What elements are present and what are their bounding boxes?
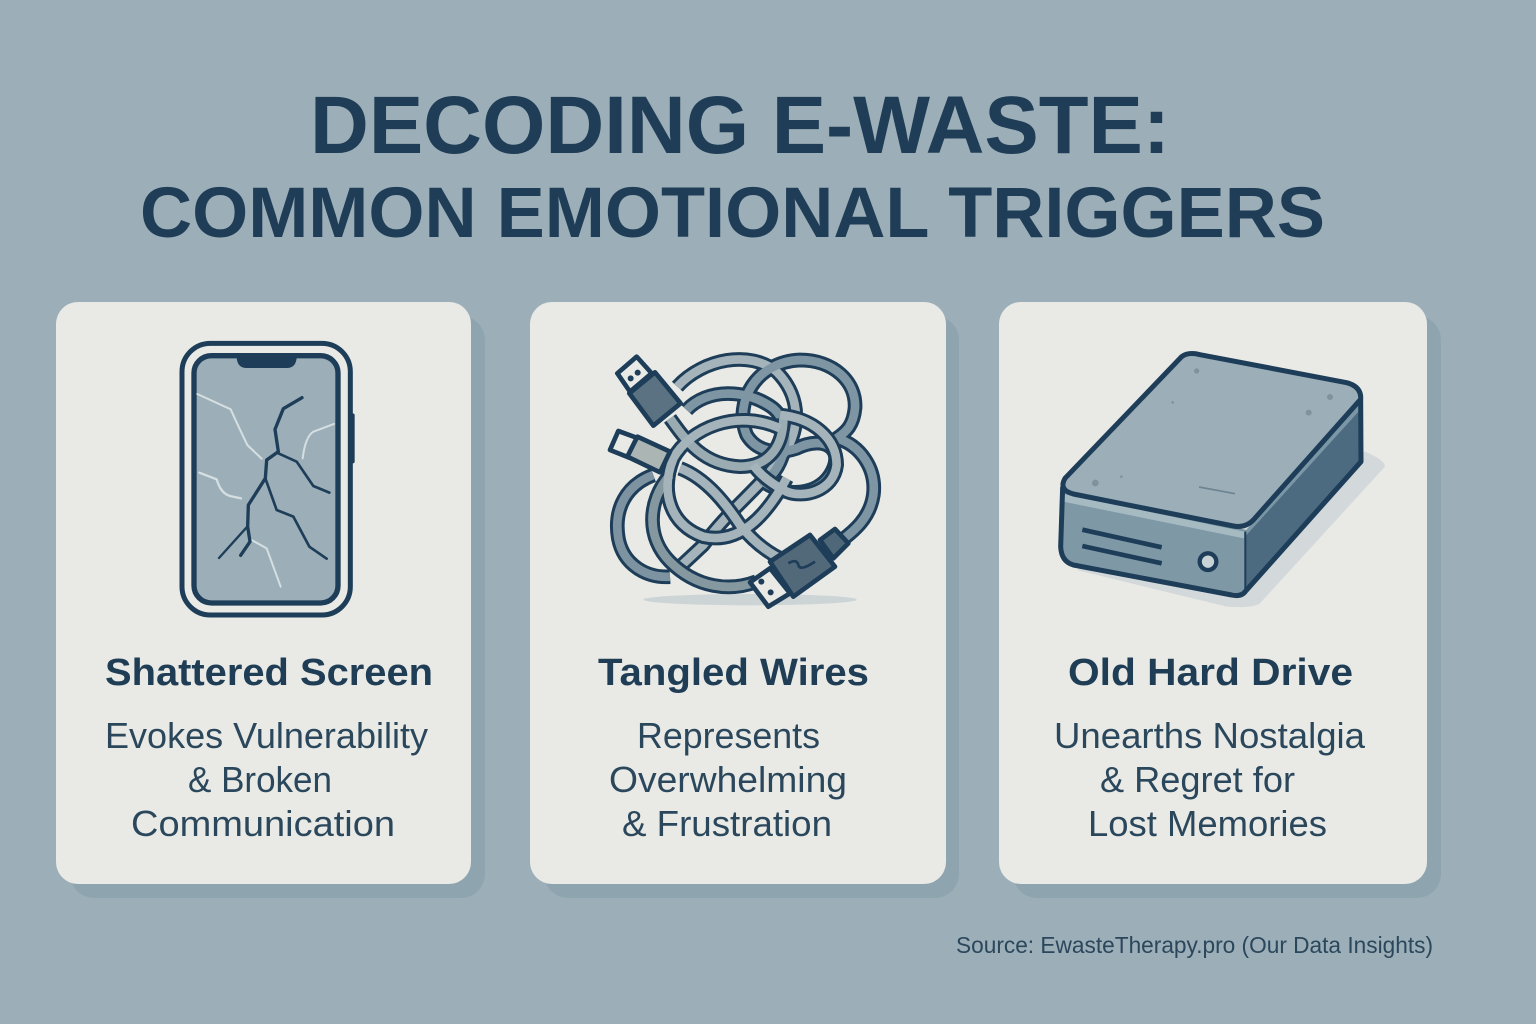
title: DECODING E-WASTE: <box>310 80 1170 171</box>
icon: hard drive <box>1060 354 1385 607</box>
title <box>140 80 1325 253</box>
heading: shattered screen: Shattered Screen <box>105 652 433 694</box>
text: old hard drive description: Lost Memories <box>1088 803 1327 844</box>
panel: tangled wires <box>530 302 959 898</box>
text: tangled wires description <box>609 715 847 844</box>
heading: old hard drive: Old Hard Drive <box>1068 652 1353 694</box>
text: shattered screen description: & Broken <box>188 759 332 800</box>
text: shattered screen description <box>105 715 428 844</box>
heading: tangled wires: Tangled Wires <box>598 652 869 694</box>
text: shattered screen description: Communication <box>131 803 395 844</box>
title: COMMON EMOTIONAL TRIGGERS <box>140 174 1325 253</box>
text: old hard drive description: Unearths Nostalgia <box>1054 715 1366 756</box>
text: shattered screen description: Evokes Vulnerability <box>105 715 428 756</box>
text: tangled wires description: & Frustration <box>622 803 832 844</box>
panel: old hard drive <box>999 302 1441 898</box>
icon: tangled cables <box>610 357 874 607</box>
usb plug: left <box>610 431 670 472</box>
text: tangled wires description: Overwhelming <box>609 759 847 800</box>
icon: cracked phone <box>182 343 355 615</box>
source note: Source: EwasteTherapy.pro (Our Data Insights) <box>956 932 1433 958</box>
usb plug: bottom <box>750 529 848 607</box>
usb plug: top <box>617 357 681 426</box>
text: tangled wires description: Represents <box>637 715 820 756</box>
text: old hard drive description: & Regret for <box>1100 759 1295 800</box>
panel: shattered screen <box>56 302 485 898</box>
text: old hard drive description <box>1054 715 1366 844</box>
